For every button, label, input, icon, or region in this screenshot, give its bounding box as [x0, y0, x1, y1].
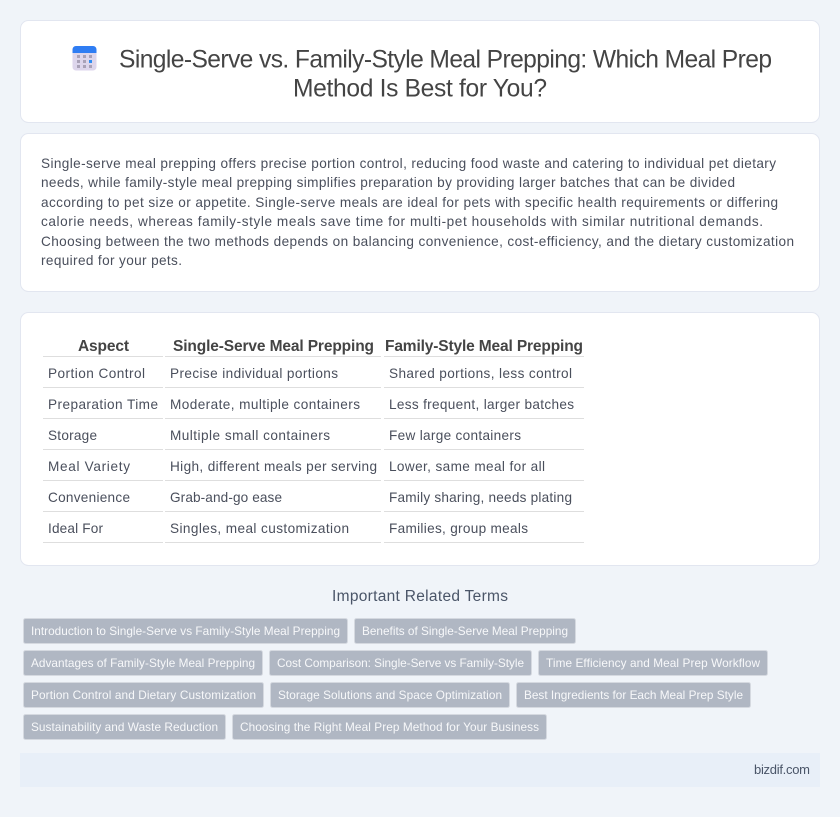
row: ideal for: Families, group meals	[389, 521, 528, 536]
table header	[78, 338, 583, 355]
table header: Family-Style Meal Prepping	[385, 338, 583, 355]
related terms tags: Cost Comparison: Single-Serve vs Family-Style	[277, 656, 524, 670]
panel: summary text: calorie needs, whereas family-style meals save time for multi-pet households with similar nutritional demands.	[41, 214, 763, 229]
row: ideal for	[48, 521, 528, 536]
row: ideal for: Singles, meal customization	[170, 521, 349, 536]
row: portion control: Portion Control	[48, 366, 145, 381]
heading: related terms: Important Related Terms	[332, 588, 508, 605]
row: storage: Few large containers	[389, 428, 521, 443]
related terms tags: Best Ingredients for Each Meal Prep Style	[524, 688, 743, 702]
related terms tags: Introduction to Single-Serve vs Family-Style Meal Prepping	[31, 624, 340, 638]
row: portion control: Shared portions, less control	[389, 366, 572, 381]
panel: summary text: according to pet size or appetite. Single-serve meals are ideal for pets with specific health requirements or differing	[41, 195, 778, 210]
related terms tags: Advantages of Family-Style Meal Prepping	[31, 656, 255, 670]
related terms tags: Time Efficiency and Meal Prep Workflow	[546, 656, 760, 670]
row: ideal for: Ideal For	[48, 521, 103, 536]
icon: calendar	[72, 46, 96, 70]
title: Method Is Best for You?	[293, 76, 547, 102]
panel: summary text: needs, while family-style meal prepping simplifies preparation by providing larger batches that can be divided	[41, 175, 735, 190]
table header: Aspect	[78, 338, 129, 355]
row: meal variety: Lower, same meal for all	[389, 459, 545, 474]
row: meal variety: High, different meals per serving	[170, 459, 377, 474]
title	[119, 46, 772, 102]
panel: header	[20, 20, 820, 122]
panel: comparison table	[20, 312, 820, 566]
row: convenience: Family sharing, needs plating	[389, 490, 572, 505]
row: meal variety	[48, 459, 545, 474]
row: portion control	[48, 366, 572, 381]
related terms tags: Sustainability and Waste Reduction	[31, 720, 218, 734]
title: Single-Serve vs. Family-Style Meal Prepping: Which Meal Prep	[119, 46, 772, 74]
panel: summary text: required for your pets.	[41, 253, 182, 268]
related terms tags: Choosing the Right Meal Prep Method for Your Business	[240, 720, 539, 734]
row: storage	[48, 428, 521, 443]
related terms tags: Portion Control and Dietary Customization	[31, 688, 256, 702]
row: convenience: Convenience	[48, 490, 130, 505]
table header: Single-Serve Meal Prepping	[173, 338, 374, 355]
panel: summary text: Choosing between the two methods depends on balancing convenience, cost-efficiency, and the dietary customization	[41, 234, 794, 249]
row: preparation time	[48, 397, 574, 412]
panel: summary text	[20, 134, 820, 292]
row: portion control: Precise individual portions	[170, 366, 338, 381]
row: convenience	[48, 490, 572, 505]
panel: summary text: Single-serve meal prepping offers precise portion control, reducing food waste and catering to individual pet dietary	[41, 156, 776, 171]
related terms tags	[24, 618, 768, 740]
footer	[20, 753, 820, 787]
related terms tags: Benefits of Single-Serve Meal Prepping	[362, 624, 568, 638]
row: preparation time: Less frequent, larger batches	[389, 397, 574, 412]
row: convenience: Grab-and-go ease	[170, 490, 282, 505]
row: preparation time: Preparation Time	[48, 397, 158, 412]
row: preparation time: Moderate, multiple containers	[170, 397, 360, 412]
related terms tags: Storage Solutions and Space Optimization	[278, 688, 502, 702]
footer: bizdif.com	[754, 762, 810, 777]
row: storage: Multiple small containers	[170, 428, 330, 443]
row: storage: Storage	[48, 428, 97, 443]
row: meal variety: Meal Variety	[48, 459, 130, 474]
